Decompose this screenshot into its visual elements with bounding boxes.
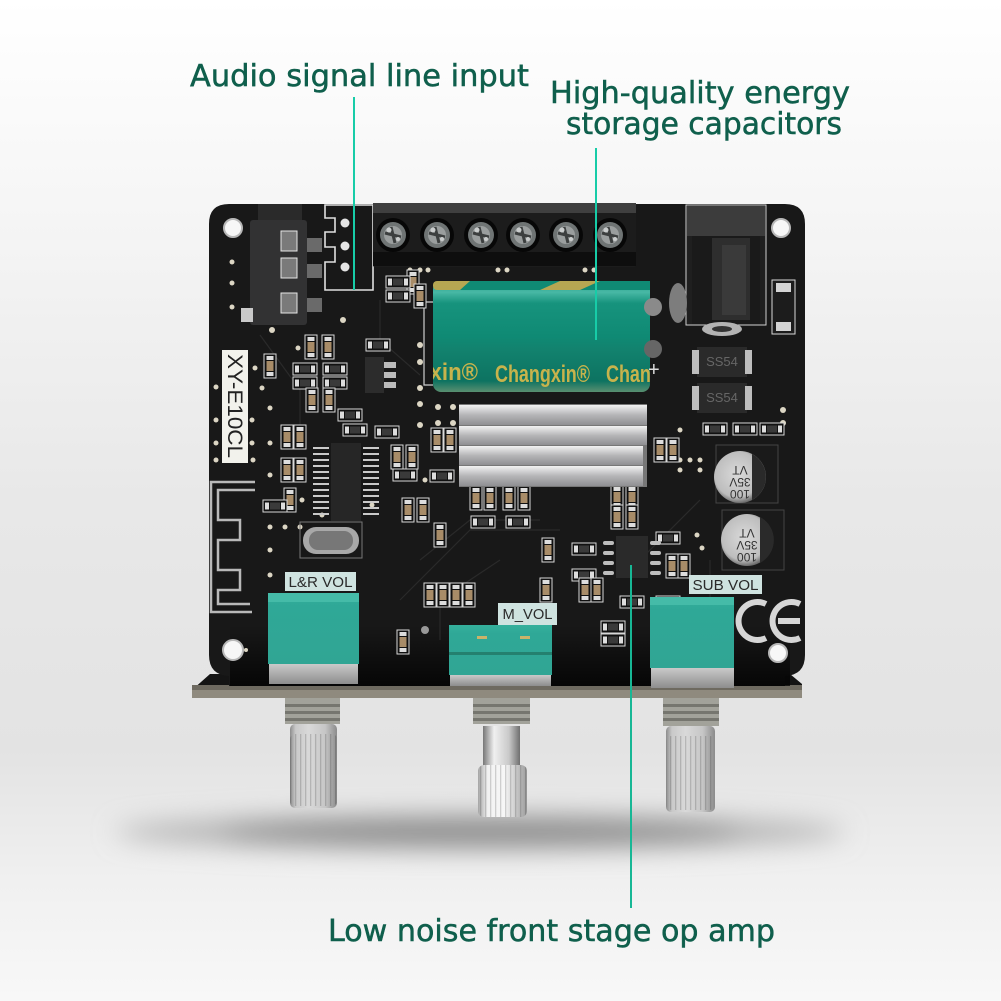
leader line: op amp <box>630 565 632 908</box>
capacitor footprint outline <box>424 302 433 385</box>
capacitor brand text: Changxin® <box>495 361 590 388</box>
leader line: audio input <box>353 97 355 290</box>
electrolytic capacitor 100V 35V bottom <box>721 510 784 570</box>
heading: capacitors <box>550 76 850 142</box>
electrolytic capacitor 100V 35V top: VT <box>732 463 748 477</box>
heat sink <box>459 404 647 487</box>
SMD parts <box>263 270 784 654</box>
PCB <box>209 204 805 686</box>
traces <box>260 300 710 640</box>
electrolytic capacitor 100V 35V bottom: 100 <box>737 550 757 564</box>
floor shadow <box>115 815 845 849</box>
potentiometer: M <box>449 625 552 686</box>
leader line: capacitors <box>595 148 597 340</box>
main capacitor <box>433 281 662 392</box>
model label: XY-E10CL <box>223 354 246 458</box>
electrolytic capacitor 100V 35V bottom: VT <box>739 526 755 540</box>
diode <box>772 280 795 334</box>
via dots <box>214 260 786 652</box>
mounting holes <box>223 219 790 662</box>
heading: audio signal line input: Audio signal line input <box>190 59 529 94</box>
DC power jack <box>669 205 766 336</box>
SS54 diodes <box>692 347 752 413</box>
capacitor brand text: Changxin® <box>606 361 701 388</box>
electrolytic capacitor 100V 35V bottom: 35V <box>736 538 758 552</box>
circuit board <box>192 203 805 817</box>
SS54 diodes: SS54 <box>706 354 738 369</box>
potentiometer: SUB <box>650 597 734 688</box>
electrolytic capacitor 100V 35V top: 100 <box>730 487 750 501</box>
right shaft <box>663 698 719 812</box>
audio jack <box>241 204 322 325</box>
front panel edge <box>192 674 802 698</box>
screw terminal block <box>373 203 636 267</box>
audio header outline <box>325 205 373 290</box>
middle shaft <box>473 698 530 817</box>
capacitor lead contacts: + <box>648 359 660 381</box>
main amplifier chip <box>313 443 379 521</box>
SS54 diodes: SS54 <box>706 390 738 405</box>
L&R VOL label: L&R VOL <box>288 575 352 591</box>
heading: capacitors: High-quality energy <box>550 76 850 111</box>
op amp chip <box>603 536 661 578</box>
heading: capacitors: storage capacitors <box>566 107 842 142</box>
M_VOL label <box>498 603 557 625</box>
left shaft <box>285 698 340 808</box>
SUB VOL label: SUB VOL <box>692 578 758 594</box>
potentiometer: L&R <box>268 593 359 684</box>
electrolytic capacitor 100V 35V top <box>714 445 778 503</box>
heading: op amp: Low noise front stage op amp <box>328 914 775 949</box>
capacitor lead contacts <box>644 298 662 381</box>
CE mark <box>739 602 800 640</box>
crystal oscillator <box>300 522 362 558</box>
small regulator chip <box>365 357 396 393</box>
electrolytic capacitor 100V 35V top: 35V <box>729 475 751 489</box>
capacitor brand text <box>433 362 650 387</box>
bluetooth antenna <box>211 482 255 612</box>
M_VOL label: M_VOL <box>502 607 552 623</box>
capacitor brand text: gxin® <box>416 359 478 386</box>
